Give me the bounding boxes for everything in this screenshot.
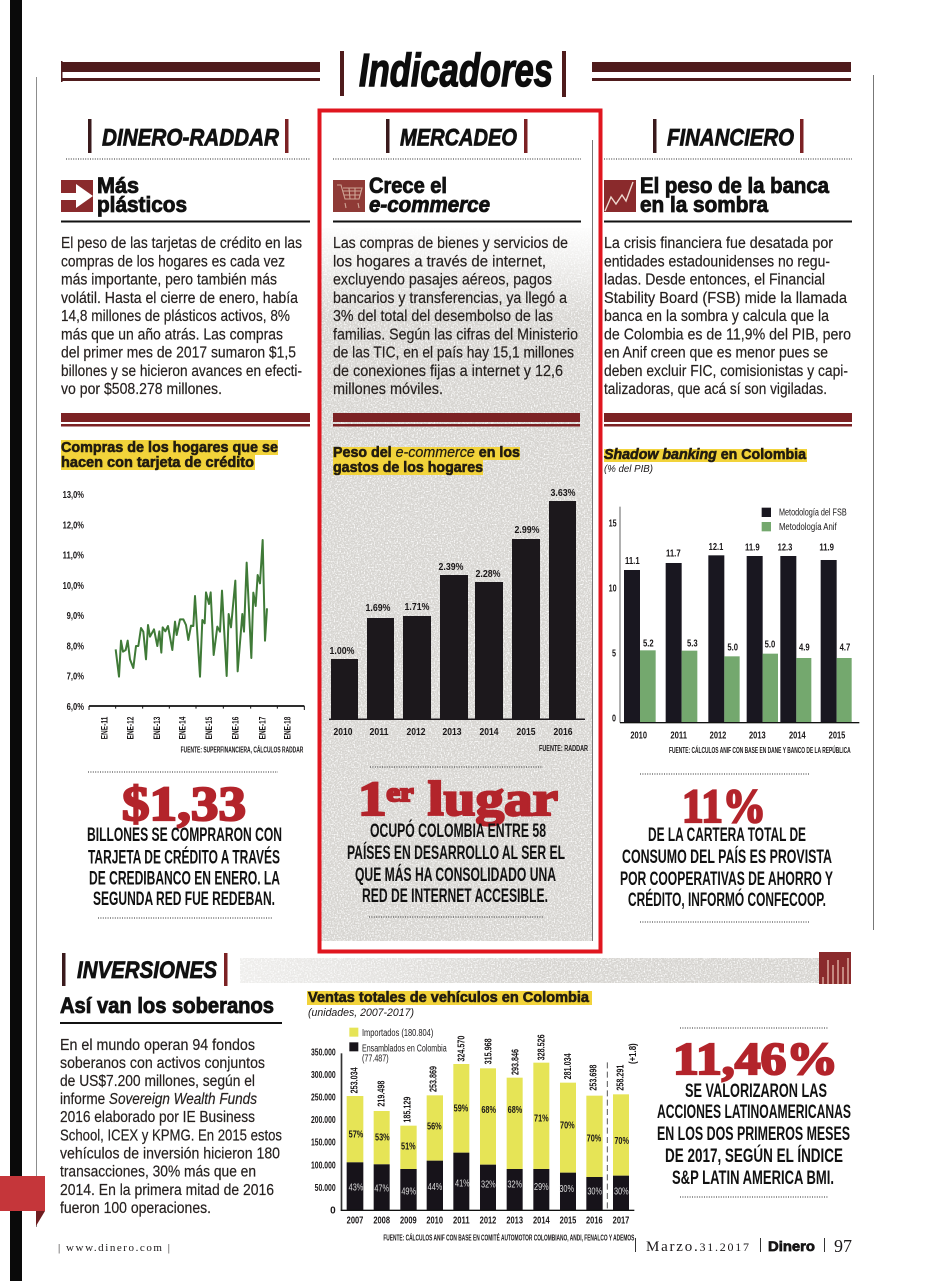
stat: 1er lugar: QUE MÁS HA CONSOLIDADO UNA xyxy=(355,863,556,886)
heading: el peso de la banca: El peso de la banca xyxy=(640,173,830,198)
text block: mercadeo: bancarios y transferencias, ya llegó a xyxy=(333,290,567,307)
text block: inversiones: 2014. En la primera mitad de 2016 xyxy=(60,1182,274,1199)
stat: 1,33: TARJETA DE CRÉDITO A TRAVÉS xyxy=(88,846,280,868)
stacked bar chart: ventas de vehiculos: 253.869 xyxy=(429,1066,440,1092)
red frame xyxy=(320,110,600,952)
bar chart: shadow banking: 2013 xyxy=(749,730,766,741)
section heading: financiero: FINANCIERO xyxy=(667,124,794,152)
text block: inversiones: soberanos con activos conjuntos xyxy=(60,1055,265,1072)
stacked bar chart: ventas de vehiculos: 43% xyxy=(349,1182,363,1193)
chart title: compras de los hogares: Compras de los hogares que se xyxy=(61,439,278,456)
text block: financiero: entidades estadounidenses no regu- xyxy=(604,253,830,270)
bar chart: shadow banking xyxy=(609,507,859,755)
stacked bar chart: ventas de vehiculos: 29% xyxy=(534,1182,549,1193)
text block: dinero-raddar: billones y se hicieron avances en efecti- xyxy=(61,363,302,380)
black spine bar xyxy=(10,0,22,1281)
stacked bar chart: ventas de vehiculos: 50.000 xyxy=(315,1183,336,1194)
stacked bar chart: ventas de vehiculos: 315.968 xyxy=(483,1038,494,1064)
stat: 1er lugar: PAÍSES EN DESARROLLO AL SER EL xyxy=(347,841,565,864)
line chart: compras con tarjeta: 6,0% xyxy=(67,702,84,713)
stacked bar chart: ventas de vehiculos: Ensamblados en Colombia xyxy=(362,1044,447,1055)
chart title: shadow banking xyxy=(604,446,807,475)
stacked bar chart: ventas de vehiculos: 328.526 xyxy=(536,1034,547,1060)
stacked bar chart: ventas de vehiculos: 2009 xyxy=(400,1215,417,1226)
bar chart: shadow banking: 12.1 xyxy=(709,542,724,553)
dotted dividers xyxy=(66,159,852,1197)
bar chart: peso del e-commerce: FUENTE: RADDAR xyxy=(539,744,588,753)
bar chart: shadow banking: 11.1 xyxy=(625,556,640,567)
icon: cart xyxy=(333,180,365,212)
section heading: dinero-raddar: DINERO-RADDAR xyxy=(102,124,280,152)
heading: crece el e-commerce: e-commerce xyxy=(369,192,490,217)
stat: 11,46% xyxy=(657,1033,851,1189)
bar chart: shadow banking: 2011 xyxy=(670,730,687,741)
bar chart: peso del e-commerce: 2012 xyxy=(406,727,426,738)
stacked bar chart: ventas de vehiculos: 219.498 xyxy=(376,1080,387,1107)
line chart: compras con tarjeta: ENE-18 xyxy=(283,717,293,739)
stacked bar chart: ventas de vehiculos: 47% xyxy=(374,1184,389,1195)
stacked bar chart: ventas de vehiculos: 53% xyxy=(375,1133,390,1144)
stacked bar chart: ventas de vehiculos: 200.000 xyxy=(311,1115,336,1126)
stacked bar chart: ventas de vehiculos: 57% xyxy=(349,1130,363,1141)
chart title: peso del e-commerce: Peso del e-commerce en los xyxy=(333,444,520,461)
stat: 1er lugar xyxy=(347,771,565,907)
stat: 11,46%: S&P LATIN AMERICA BMI. xyxy=(672,1167,834,1189)
stat: 1,33: SEGUNDA RED FUE REDEBAN. xyxy=(93,888,275,910)
bar chart: peso del e-commerce: 1.00% xyxy=(330,646,355,657)
stacked bar chart: ventas de vehiculos: 150.000 xyxy=(311,1138,336,1149)
line chart: compras con tarjeta: 7,0% xyxy=(67,672,84,683)
text block: financiero: ladas. Desde entonces, el Financial xyxy=(604,272,825,288)
heading: mas plasticos: Más xyxy=(97,173,139,198)
chart title: peso del e-commerce xyxy=(333,444,520,476)
text block: mercadeo: familias. Según las cifras del Ministerio xyxy=(333,326,578,343)
stat: 1er lugar: OCUPÓ COLOMBIA ENTRE 58 xyxy=(370,818,546,842)
section heading: mercadeo: MERCADEO xyxy=(400,124,517,152)
line chart: compras con tarjeta: ENE-14 xyxy=(177,716,187,739)
text block: financiero: banca en la sombra y calcula que la xyxy=(604,308,829,325)
line chart: compras con tarjeta: ENE-16 xyxy=(231,717,241,739)
bar chart: shadow banking: 2014 xyxy=(789,730,806,741)
stat: 1,33: $1,33 xyxy=(122,776,246,831)
stacked bar chart: ventas de vehiculos: 30% xyxy=(559,1184,574,1195)
stacked bar chart: ventas de vehiculos: 2013 xyxy=(506,1215,523,1226)
heading: crece el e-commerce: Crece el xyxy=(369,173,447,198)
stacked bar chart: ventas de vehiculos: 71% xyxy=(534,1114,549,1125)
page margin line left xyxy=(36,77,37,1227)
bar chart: peso del e-commerce: 2013 xyxy=(442,727,462,738)
chart title: ventas de vehiculos: Ventas totales de vehículos en Colombia xyxy=(308,989,590,1006)
stacked bar chart: ventas de vehiculos: 56% xyxy=(427,1122,442,1133)
stacked bar chart: ventas de vehiculos: 2011 xyxy=(453,1215,470,1226)
bar chart: peso del e-commerce: 2010 xyxy=(334,727,353,738)
stacked bar chart: ventas de vehiculos: 281.034 xyxy=(563,1053,574,1079)
textured strip xyxy=(240,958,819,983)
text block: financiero: Stability Board (FSB) mide la llamada xyxy=(604,290,847,307)
text block: dinero-raddar: compras de los hogares es cada vez xyxy=(61,253,285,270)
stacked bar chart: ventas de vehiculos: 324.570 xyxy=(457,1035,468,1062)
stat: 1er lugar: er xyxy=(387,778,414,807)
stacked bar chart: ventas de vehiculos: 293.846 xyxy=(510,1049,521,1075)
chart title: compras de los hogares xyxy=(61,439,278,471)
bar chart: shadow banking: 15 xyxy=(609,519,617,530)
bar chart: peso del e-commerce: 2.39% xyxy=(438,562,464,573)
heading: asi van los soberanos: Así van los soberanos xyxy=(60,993,274,1018)
section heading: inversiones: INVERSIONES xyxy=(77,957,217,984)
text block: mercadeo: excluyendo pasajes aéreos, pagos xyxy=(333,272,552,288)
heading: el peso de la banca: en la sombra xyxy=(640,192,769,217)
bar chart: shadow banking: 12.3 xyxy=(778,543,793,554)
text block: mercadeo: Las compras de bienes y servicios de xyxy=(333,235,568,252)
stacked bar chart: ventas de vehiculos: 2007 xyxy=(347,1215,364,1226)
section heading: inversiones xyxy=(62,953,228,986)
bar chart: shadow banking: Metodología Anif xyxy=(779,522,837,533)
footer: right folio xyxy=(635,1236,852,1256)
bar chart: shadow banking: 2012 xyxy=(710,730,727,741)
stacked bar chart: ventas de vehiculos: 68% xyxy=(481,1105,496,1116)
stacked bar chart: ventas de vehiculos: 185.129 xyxy=(403,1096,414,1123)
bar chart: shadow banking: 2010 xyxy=(630,730,647,741)
stacked bar chart: ventas de vehiculos: 68% xyxy=(508,1105,522,1116)
chart title: ventas de vehiculos xyxy=(307,989,592,1019)
bar chart: shadow banking: 4.9 xyxy=(799,643,810,654)
line chart: compras con tarjeta: ENE-13 xyxy=(152,717,162,739)
stacked bar chart: ventas de vehiculos: 2015 xyxy=(560,1215,577,1226)
text block: inversiones: de US$7.200 millones, según el xyxy=(60,1073,255,1090)
stat: 1,33: DE CREDIBANCO EN ENERO. LA xyxy=(89,868,280,890)
stacked bar chart: ventas de vehiculos: 2010 xyxy=(426,1215,443,1226)
stat: 11%: DE LA CARTERA TOTAL DE xyxy=(648,824,806,846)
bar chart: peso del e-commerce: 2.28% xyxy=(476,569,501,580)
stacked bar chart: ventas de vehiculos: 70% xyxy=(560,1121,575,1132)
footer: left: | www.dinero.com | xyxy=(58,1242,170,1254)
red separator rules xyxy=(61,413,852,426)
text block: mercadeo: de conexiones fijas a internet y 12,6 xyxy=(333,363,563,380)
stacked bar chart: ventas de vehiculos: 253.698 xyxy=(588,1064,599,1091)
stacked bar chart: ventas de vehiculos: 2014 xyxy=(533,1215,550,1226)
text block: inversiones: School, ICEX y KPMG. En 2015 estos xyxy=(60,1128,282,1144)
line chart: compras con tarjeta: ENE-17 xyxy=(257,717,267,739)
stat: 1,33 xyxy=(87,776,282,910)
bar chart: peso del e-commerce: 3.63% xyxy=(550,488,576,499)
stat: 11,46%: 11,46% xyxy=(673,1033,838,1084)
chart title: peso del e-commerce: gastos de los hogares xyxy=(333,459,483,476)
heading: el peso de la banca xyxy=(640,173,830,217)
heading: crece el e-commerce xyxy=(369,173,490,217)
chart title: shadow banking: Shadow banking en Colombia xyxy=(604,446,807,463)
icon: chart line xyxy=(604,180,636,212)
bar chart: peso del e-commerce: 2.99% xyxy=(514,525,540,536)
text block: dinero-raddar: más que un año atrás. Las compras xyxy=(61,326,283,343)
stacked bar chart: ventas de vehiculos: 2017 xyxy=(613,1215,630,1226)
text block: financiero: deben excluir FIC, comisionistas y capi- xyxy=(604,363,848,380)
line chart: compras con tarjeta: ENE-15 xyxy=(204,717,214,739)
line chart: compras con tarjeta: FUENTE: SUPERFINANCIERA, CÁLCULOS RADDAR xyxy=(181,745,303,754)
text block: financiero: La crisis financiera fue desatada por xyxy=(604,235,833,252)
text block: inversiones: vehículos de inversión hicieron 180 xyxy=(60,1146,280,1162)
chart title: shadow banking: (% del PIB) xyxy=(604,464,653,475)
icon: arrow xyxy=(61,180,93,212)
page margin line right xyxy=(873,75,874,930)
text block: mercadeo xyxy=(333,235,578,398)
heading: mas plasticos xyxy=(97,173,187,217)
text block: mercadeo: los hogares a través de internet, xyxy=(333,253,546,270)
bar chart: shadow banking: 11.7 xyxy=(666,549,681,560)
column divider xyxy=(592,140,593,941)
text block: inversiones: transacciones, 30% más que en xyxy=(60,1164,256,1180)
text block: mercadeo: de las TIC, en el país hay 15,1 millones xyxy=(333,344,574,362)
text block: dinero-raddar: vo por $508.278 millones. xyxy=(61,381,222,398)
heading rules xyxy=(60,220,852,1024)
bar chart: shadow banking: 5.0 xyxy=(727,643,738,654)
title band xyxy=(61,44,851,97)
stacked bar chart: ventas de vehiculos: 30% xyxy=(614,1186,629,1197)
text block: inversiones: fueron 100 operaciones. xyxy=(60,1200,211,1217)
stacked bar chart: ventas de vehiculos: (77.487) xyxy=(362,1054,389,1065)
text block: inversiones: En el mundo operan 94 fondos xyxy=(60,1037,255,1054)
line chart: compras con tarjeta: 12,0% xyxy=(63,520,84,531)
icon: bars xyxy=(819,952,851,984)
bar chart: shadow banking: 0 xyxy=(612,714,616,725)
stacked bar chart: ventas de vehiculos: 51% xyxy=(401,1142,416,1153)
text block: dinero-raddar: volátil. Hasta el cierre de enero, había xyxy=(61,290,298,307)
stacked bar chart: ventas de vehiculos: 100.000 xyxy=(311,1160,336,1171)
footer: right folio: Dinero xyxy=(768,1238,815,1254)
bar chart: shadow banking: Metodología del FSB xyxy=(779,508,847,519)
bar chart: peso del e-commerce: 2015 xyxy=(516,727,536,738)
line chart: compras con tarjeta: 9,0% xyxy=(67,611,84,622)
stat: 1er lugar: RED DE INTERNET ACCESIBLE. xyxy=(362,885,548,907)
bar chart: shadow banking: 5.0 xyxy=(765,639,776,650)
line chart: compras con tarjeta: 10,0% xyxy=(63,581,84,592)
text block: financiero: de Colombia es de 11,9% del PIB, pero xyxy=(604,326,851,343)
bar chart: peso del e-commerce: 2014 xyxy=(480,727,499,738)
stacked bar chart: ventas de vehiculos: 44% xyxy=(428,1182,442,1193)
stacked bar chart: ventas de vehiculos: 350.000 xyxy=(311,1047,336,1058)
bar chart: peso del e-commerce xyxy=(329,488,588,753)
stacked bar chart: ventas de vehiculos: 258.291 xyxy=(615,1064,626,1091)
stacked bar chart: ventas de vehiculos: 2016 xyxy=(586,1215,603,1226)
text block: mercadeo: millones móviles. xyxy=(333,381,443,398)
line chart: compras con tarjeta: ENE-12 xyxy=(125,717,135,739)
text block: inversiones: 2016 elaborado por IE Business xyxy=(60,1109,255,1126)
stacked bar chart: ventas de vehiculos: 2008 xyxy=(373,1215,390,1226)
title band: Indicadores xyxy=(359,44,553,96)
stacked bar chart: ventas de vehiculos: 0 xyxy=(330,1206,336,1217)
line chart: compras con tarjeta: ENE-11 xyxy=(99,717,109,739)
bar chart: peso del e-commerce: 2011 xyxy=(370,727,389,738)
stacked bar chart: ventas de vehiculos: 59% xyxy=(454,1104,468,1115)
bar chart: shadow banking: 2015 xyxy=(829,730,846,741)
chart title: ventas de vehiculos: (unidades, 2007-2017) xyxy=(308,1007,414,1019)
text block: financiero: talizadoras, que acá sí son vigiladas. xyxy=(604,381,827,398)
bar chart: shadow banking: 11.9 xyxy=(745,543,760,554)
text block: dinero-raddar: más importante, pero también más xyxy=(61,272,277,288)
red page tab xyxy=(0,1176,45,1226)
footer: right folio: 97 xyxy=(834,1236,852,1256)
line chart: compras con tarjeta xyxy=(63,490,304,754)
bar chart: shadow banking: 4.7 xyxy=(840,643,851,654)
bar chart: peso del e-commerce: 1.71% xyxy=(404,602,430,613)
line chart: compras con tarjeta: 11,0% xyxy=(63,551,84,562)
stacked bar chart: ventas de vehiculos: 41% xyxy=(455,1179,470,1190)
section heading: mercadeo xyxy=(386,119,528,153)
text block: inversiones: informe Sovereign Wealth Funds xyxy=(60,1091,257,1108)
panel: mercadeo textured background xyxy=(321,228,592,941)
text block: financiero: en Anif creen que es menor pues se xyxy=(604,344,828,362)
stat: 1,33: BILLONES SE COMPRARON CON xyxy=(87,824,282,846)
stacked bar chart: ventas de vehiculos: 70% xyxy=(587,1133,601,1144)
stacked bar chart: ventas de vehiculos xyxy=(311,1028,639,1242)
stacked bar chart: ventas de vehiculos: 253.034 xyxy=(349,1067,360,1093)
stat: 11,46%: DE 2017, SEGÚN EL ÍNDICE xyxy=(665,1143,843,1167)
heading: mas plasticos: plásticos xyxy=(97,192,187,217)
bar chart: shadow banking: 5.3 xyxy=(687,638,698,649)
stacked bar chart: ventas de vehiculos: 30% xyxy=(587,1186,602,1197)
bar chart: peso del e-commerce: 1.69% xyxy=(366,603,391,614)
stacked bar chart: ventas de vehiculos: 250.000 xyxy=(311,1093,336,1104)
footer: right folio: Marzo.31.2017 xyxy=(646,1239,749,1255)
chart title: compras de los hogares: hacen con tarjeta de crédito xyxy=(61,454,254,471)
bar chart: shadow banking: 5 xyxy=(612,649,616,660)
line chart: compras con tarjeta: 8,0% xyxy=(67,641,84,652)
text block: dinero-raddar: El peso de las tarjetas de crédito en las xyxy=(61,235,302,252)
stacked bar chart: ventas de vehiculos: FUENTE: CÁLCULOS ANIF CON BASE EN COMITÉ AUTOMOTOR COLOMBIANO, ANDI, FENALCO Y ADEMOS xyxy=(383,1233,635,1242)
text block: dinero-raddar xyxy=(61,235,302,398)
bar chart: peso del e-commerce: 2016 xyxy=(554,727,573,738)
stacked bar chart: ventas de vehiculos: Importados (180.804) xyxy=(362,1028,433,1039)
text block: financiero xyxy=(604,235,851,398)
stacked bar chart: ventas de vehiculos: 32% xyxy=(481,1179,496,1190)
stat: 11,46%: SE VALORIZARON LAS xyxy=(685,1080,827,1102)
line chart: compras con tarjeta: 13,0% xyxy=(63,490,84,501)
stacked bar chart: ventas de vehiculos: 70% xyxy=(614,1136,629,1147)
stat: 11% xyxy=(620,780,833,911)
text block: mercadeo: 3% del total del desembolso de las xyxy=(333,308,553,325)
stat: 1er lugar: 1 xyxy=(358,771,382,826)
stat: 1er lugar: lugar xyxy=(414,771,558,826)
section heading: financiero xyxy=(653,119,804,153)
stat: 11%: 11% xyxy=(682,780,766,833)
text block: inversiones xyxy=(60,1037,282,1217)
bar chart: shadow banking: 11.9 xyxy=(819,543,834,554)
text block: dinero-raddar: del primer mes de 2017 sumaron $1,5 xyxy=(61,344,296,362)
stacked bar chart: ventas de vehiculos: 2012 xyxy=(480,1215,497,1226)
section heading: dinero-raddar xyxy=(88,119,288,153)
stacked bar chart: ventas de vehiculos: 49% xyxy=(401,1187,416,1198)
stacked bar chart: ventas de vehiculos: 300.000 xyxy=(311,1070,336,1081)
bar chart: shadow banking: 10 xyxy=(609,584,617,595)
text block: dinero-raddar: 14,8 millones de plásticos activos, 8% xyxy=(61,308,290,325)
bar chart: shadow banking: 5.2 xyxy=(643,638,654,649)
stacked bar chart: ventas de vehiculos: (+1.8) xyxy=(628,1043,639,1064)
stacked bar chart: ventas de vehiculos: 32% xyxy=(507,1179,522,1190)
